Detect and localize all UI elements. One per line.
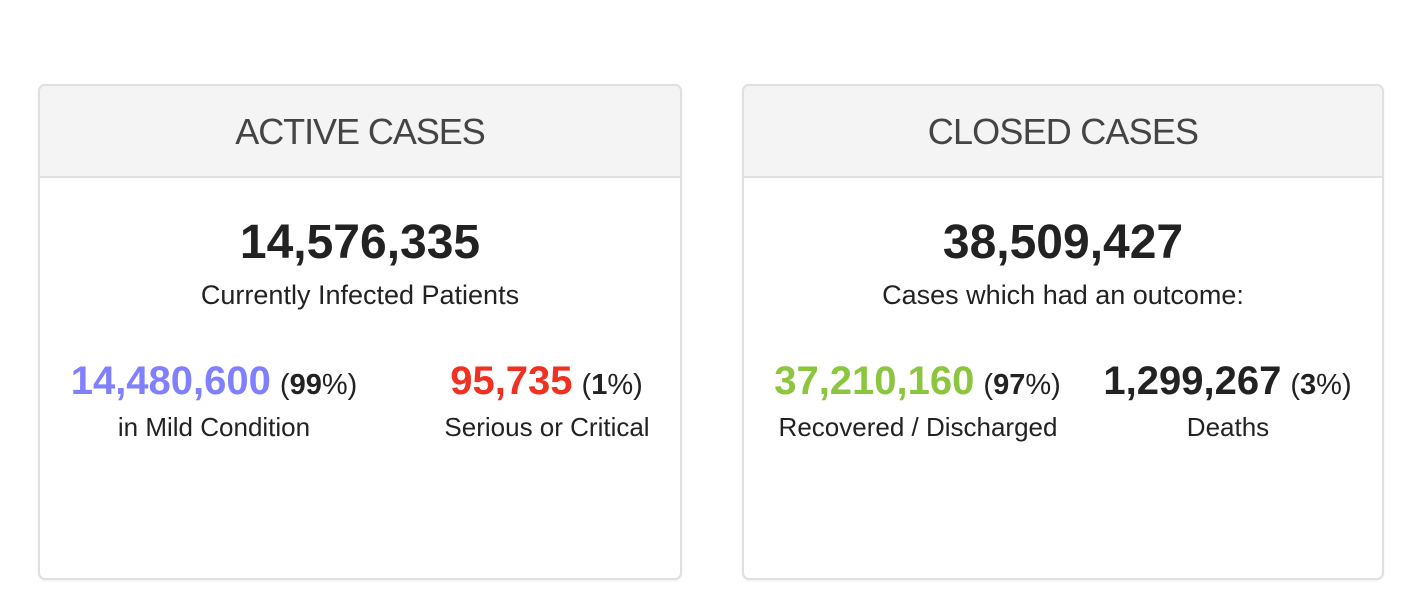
- total active cases number: 14,576,335: [240, 216, 480, 269]
- label: in mild condition: in Mild Condition: [118, 412, 310, 442]
- label: deaths: Deaths: [1187, 412, 1269, 442]
- label: serious or critical: Serious or Critical: [444, 412, 650, 442]
- panel header: active cases: [40, 86, 680, 178]
- stat: serious or critical count: 95,735 (1%): [450, 359, 643, 403]
- stat: recovered count: 37,210,160 (97%): [774, 359, 1061, 403]
- heading: active cases: ACTIVE CASES: [235, 111, 485, 152]
- panel: closed cases: [742, 84, 1384, 580]
- panel header: closed cases: [744, 86, 1382, 178]
- label: cases which had an outcome: Cases which had an outcome:: [882, 280, 1244, 310]
- label: recovered or discharged: Recovered / Discharged: [779, 412, 1057, 442]
- total closed cases number: 38,509,427: [943, 216, 1183, 269]
- stat: deaths count: 1,299,267 (3%): [1103, 359, 1352, 403]
- panel: active cases: [38, 84, 682, 580]
- heading: closed cases: CLOSED CASES: [928, 111, 1198, 152]
- stat: mild condition count: 14,480,600 (99%): [71, 359, 357, 403]
- label: currently infected patients: Currently Infected Patients: [201, 280, 519, 310]
